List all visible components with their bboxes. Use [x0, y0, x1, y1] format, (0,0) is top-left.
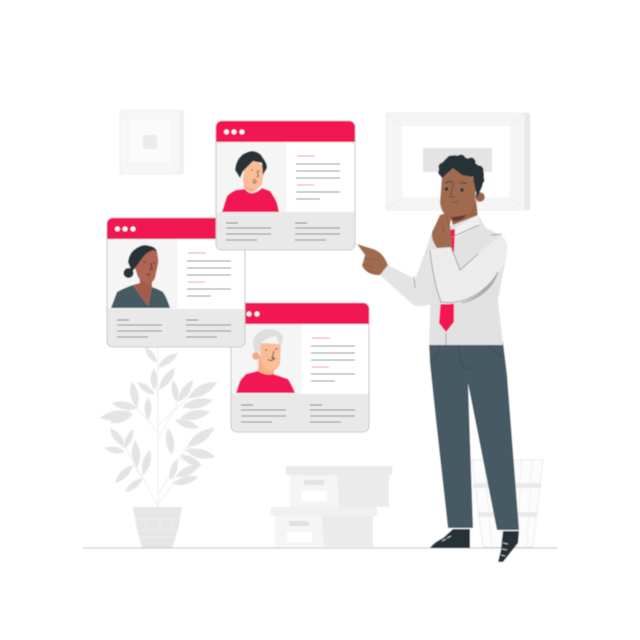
- pointing hand: [357, 244, 388, 275]
- left shoe: [430, 529, 470, 548]
- hair: [128, 245, 157, 272]
- footer heading lines: [226, 222, 307, 224]
- head: [260, 343, 281, 371]
- neck: [243, 175, 258, 192]
- top: [111, 285, 170, 308]
- face features: [445, 182, 467, 221]
- portrait: young man: [222, 151, 279, 212]
- shirt: [236, 371, 295, 393]
- chin hand: [432, 213, 452, 248]
- waste basket: [472, 460, 543, 547]
- footer panel: [231, 394, 369, 432]
- window dots: [115, 226, 136, 232]
- footer heading lines: [241, 404, 322, 406]
- face features: [143, 262, 155, 275]
- footer panel: [216, 212, 355, 250]
- plant: [100, 346, 217, 548]
- footer heading lines: [117, 319, 198, 321]
- neck: [258, 356, 274, 375]
- info accent lines: [312, 338, 330, 367]
- pointing hand fingers: [362, 258, 375, 272]
- neck: [450, 200, 478, 232]
- profile card: older man: [231, 303, 369, 432]
- tie: [439, 229, 455, 332]
- profile card: young man: [216, 121, 355, 250]
- profile card: woman: [107, 218, 245, 347]
- head: [243, 159, 264, 189]
- card body: [231, 303, 369, 432]
- info text lines: [241, 346, 355, 422]
- shoelaces: [442, 536, 508, 556]
- hair: [438, 154, 484, 198]
- footer panel: [107, 309, 245, 347]
- small wall frame: [120, 110, 184, 174]
- info accent lines: [297, 156, 315, 185]
- pointing arm sleeve: [380, 234, 432, 306]
- lower box: [271, 507, 377, 547]
- window dots: [224, 129, 244, 135]
- face features: [265, 349, 278, 360]
- arm shadow: [462, 272, 498, 303]
- right shoe: [498, 531, 519, 562]
- plant stems: [100, 346, 217, 507]
- info accent lines: [188, 253, 206, 282]
- hair bun: [124, 268, 134, 278]
- portrait: woman: [111, 245, 170, 308]
- card body: [107, 218, 245, 347]
- folded arm: [430, 236, 507, 304]
- trouser details: [430, 344, 502, 368]
- shirt torso: [429, 215, 507, 345]
- window dots: [239, 311, 260, 317]
- info text lines: [226, 164, 340, 240]
- ear: [475, 192, 485, 202]
- portrait: older man: [236, 329, 295, 393]
- ear: [252, 352, 260, 360]
- photo panel: [216, 142, 286, 212]
- photo panel: [108, 239, 178, 309]
- face features: [251, 170, 260, 183]
- head: [135, 249, 158, 285]
- stacked boxes: [271, 466, 392, 547]
- collar: [452, 215, 480, 240]
- plant pot: [133, 507, 182, 548]
- grey hair: [253, 329, 283, 353]
- info text lines: [117, 261, 231, 337]
- photo panel: [232, 324, 302, 394]
- shirt: [222, 188, 279, 212]
- upper box: [286, 466, 392, 507]
- floor line: [83, 547, 558, 549]
- card body: [216, 121, 355, 250]
- header bar: [216, 121, 355, 142]
- header bar: [107, 218, 245, 239]
- trousers: [429, 342, 519, 530]
- head: [440, 164, 476, 220]
- arm outline: [414, 225, 502, 345]
- header bar: [231, 303, 369, 324]
- hair: [235, 151, 267, 178]
- chin hand fingers: [441, 215, 449, 234]
- neck and chest: [133, 272, 152, 306]
- man: [357, 154, 519, 562]
- large wall frame: [386, 113, 530, 210]
- plant leaves: [100, 347, 217, 492]
